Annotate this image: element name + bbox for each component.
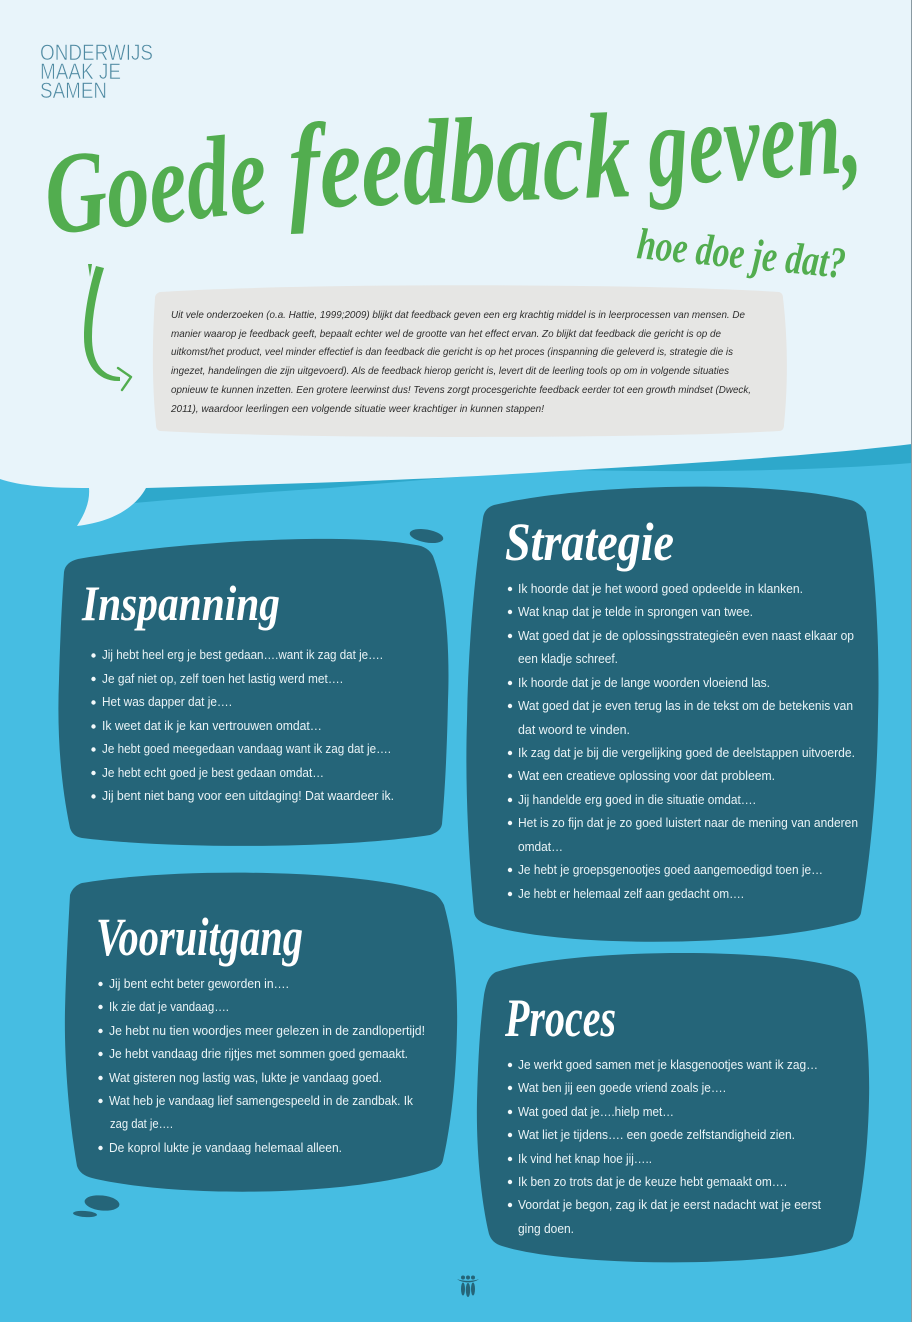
- brand wordmark: ONDERWIJS: [40, 40, 153, 65]
- list: Ik vind het knap hoe jij…..: [518, 1152, 652, 1166]
- list: Je gaf niet op, zelf toen het lastig werd met….: [102, 672, 343, 686]
- list: Je hebt je groepsgenootjes goed aangemoedigd toen je…: [518, 863, 823, 877]
- list: Wat ben jij een goede vriend zoals je….: [518, 1081, 726, 1095]
- panel: proces: [477, 953, 869, 1262]
- list: Voordat je begon, zag ik dat je eerst nadacht wat je eerst: [518, 1198, 821, 1212]
- list: De koprol lukte je vandaag helemaal alleen.: [109, 1141, 342, 1155]
- intro text: uitkomst/het product, veel minder effectief is dan feedback die gericht is op het proces (inspanning die geleverd is, strategie die is: [171, 346, 734, 358]
- list: zag dat je….: [110, 1117, 173, 1131]
- list: Wat goed dat je….hielp met…: [518, 1105, 674, 1119]
- intro text: 2011), waardoor leerlingen een volgende situatie weer krachtiger in kunnen stappen!: [170, 403, 544, 415]
- icon: curved arrow: [84, 264, 131, 390]
- list: Je hebt nu tien woordjes meer gelezen in de zandlopertijd!: [109, 1024, 425, 1038]
- panel: vooruitgang: [65, 873, 457, 1192]
- brand wordmark: [40, 40, 153, 103]
- title: [38, 69, 865, 260]
- darker wave band: [134, 440, 912, 503]
- list: [98, 977, 425, 1155]
- list: Ik zie dat je vandaag….: [109, 1000, 229, 1014]
- heading: Inspanning: [81, 575, 280, 631]
- list: Het was dapper dat je….: [102, 695, 232, 709]
- list: Ik hoorde dat je het woord goed opdeelde in klanken.: [518, 582, 803, 596]
- list: Wat goed dat je de oplossingsstrategieën even naast elkaar op: [518, 629, 854, 643]
- list: Jij bent niet bang voor een uitdaging! Dat waardeer ik.: [102, 789, 394, 803]
- list: Wat goed dat je even terug las in de tekst om de betekenis van: [518, 699, 853, 713]
- title: feedback: [286, 88, 633, 235]
- panel: strategie: [466, 487, 878, 942]
- brand wordmark: MAAK JE: [40, 59, 121, 84]
- list: ging doen.: [518, 1222, 574, 1236]
- list: Je hebt er helemaal zelf aan gedacht om….: [518, 887, 744, 901]
- heading: Vooruitgang: [96, 907, 303, 967]
- panel: introduction: [153, 285, 787, 437]
- list: Wat liet je tijdens…. een goede zelfstandigheid zien.: [518, 1128, 795, 1142]
- intro text: manier waarop je feedback geeft, bepaalt echter wel de grootte van het effect ervan. Zo blijkt dat feedback die gericht is op de: [171, 328, 721, 340]
- heading: Proces: [504, 988, 616, 1048]
- list: [91, 648, 394, 803]
- list: Het is zo fijn dat je zo goed luistert naar de mening van anderen: [518, 816, 858, 830]
- subtitle: hoe doe je dat?: [635, 219, 848, 288]
- list: Je hebt vandaag drie rijtjes met sommen goed gemaakt.: [109, 1047, 408, 1061]
- list: Je werkt goed samen met je klasgenootjes want ik zag…: [518, 1058, 818, 1072]
- list: Jij handelde erg goed in die situatie omdat….: [518, 793, 756, 807]
- list: Ik hoorde dat je de lange woorden vloeiend las.: [518, 676, 770, 690]
- list: Ik zag dat je bij die vergelijking goed de deelstappen uitvoerde.: [518, 746, 855, 760]
- heading: Strategie: [505, 512, 674, 572]
- intro text: Uit vele onderzoeken (o.a. Hattie, 1999;2009) blijkt dat feedback geven een erg krachtig middel is in leerprocessen van mensen. De: [171, 309, 745, 321]
- list: Je hebt goed meegedaan vandaag want ik zag dat je….: [102, 742, 391, 756]
- list: dat woord te vinden.: [518, 723, 630, 737]
- list: Ik ben zo trots dat je de keuze hebt gemaakt om….: [518, 1175, 787, 1189]
- speech bubble background: [0, 0, 912, 526]
- list: Jij bent echt beter geworden in….: [109, 977, 289, 991]
- decorative blobs bottom: [73, 1194, 120, 1218]
- list: omdat…: [518, 840, 563, 854]
- title: Goede: [38, 109, 273, 260]
- intro text: ingezet, handelingen die zijn uitgevoerd). Als de feedback hierop gericht is, levert dit de leerling tools op om in volgende situaties: [171, 365, 730, 377]
- list: Je hebt echt goed je best gedaan omdat…: [102, 766, 324, 780]
- list: Wat gisteren nog lastig was, lukte je vandaag goed.: [109, 1071, 382, 1085]
- list: Jij hebt heel erg je best gedaan….want ik zag dat je….: [102, 648, 383, 662]
- list: Ik weet dat ik je kan vertrouwen omdat…: [102, 719, 322, 733]
- icon: footer logo: [457, 1276, 479, 1297]
- decorative blob top: [409, 527, 444, 545]
- list: [508, 582, 858, 901]
- list: Wat heb je vandaag lief samengespeeld in de zandbak. Ik: [109, 1094, 414, 1108]
- list: [508, 1058, 821, 1236]
- panel: inspanning: [58, 539, 448, 846]
- brand wordmark: SAMEN: [40, 78, 107, 103]
- intro text: [170, 309, 751, 415]
- list: Wat knap dat je telde in sprongen van twee.: [518, 605, 753, 619]
- list: een kladje schreef.: [518, 652, 618, 666]
- list: Wat een creatieve oplossing voor dat probleem.: [518, 769, 775, 783]
- intro text: opnieuw te kunnen inzetten. Een grotere leerwinst dus! Tevens zorgt procesgerichte feedback eerder tot een growth mindset (Dweck,: [171, 384, 751, 396]
